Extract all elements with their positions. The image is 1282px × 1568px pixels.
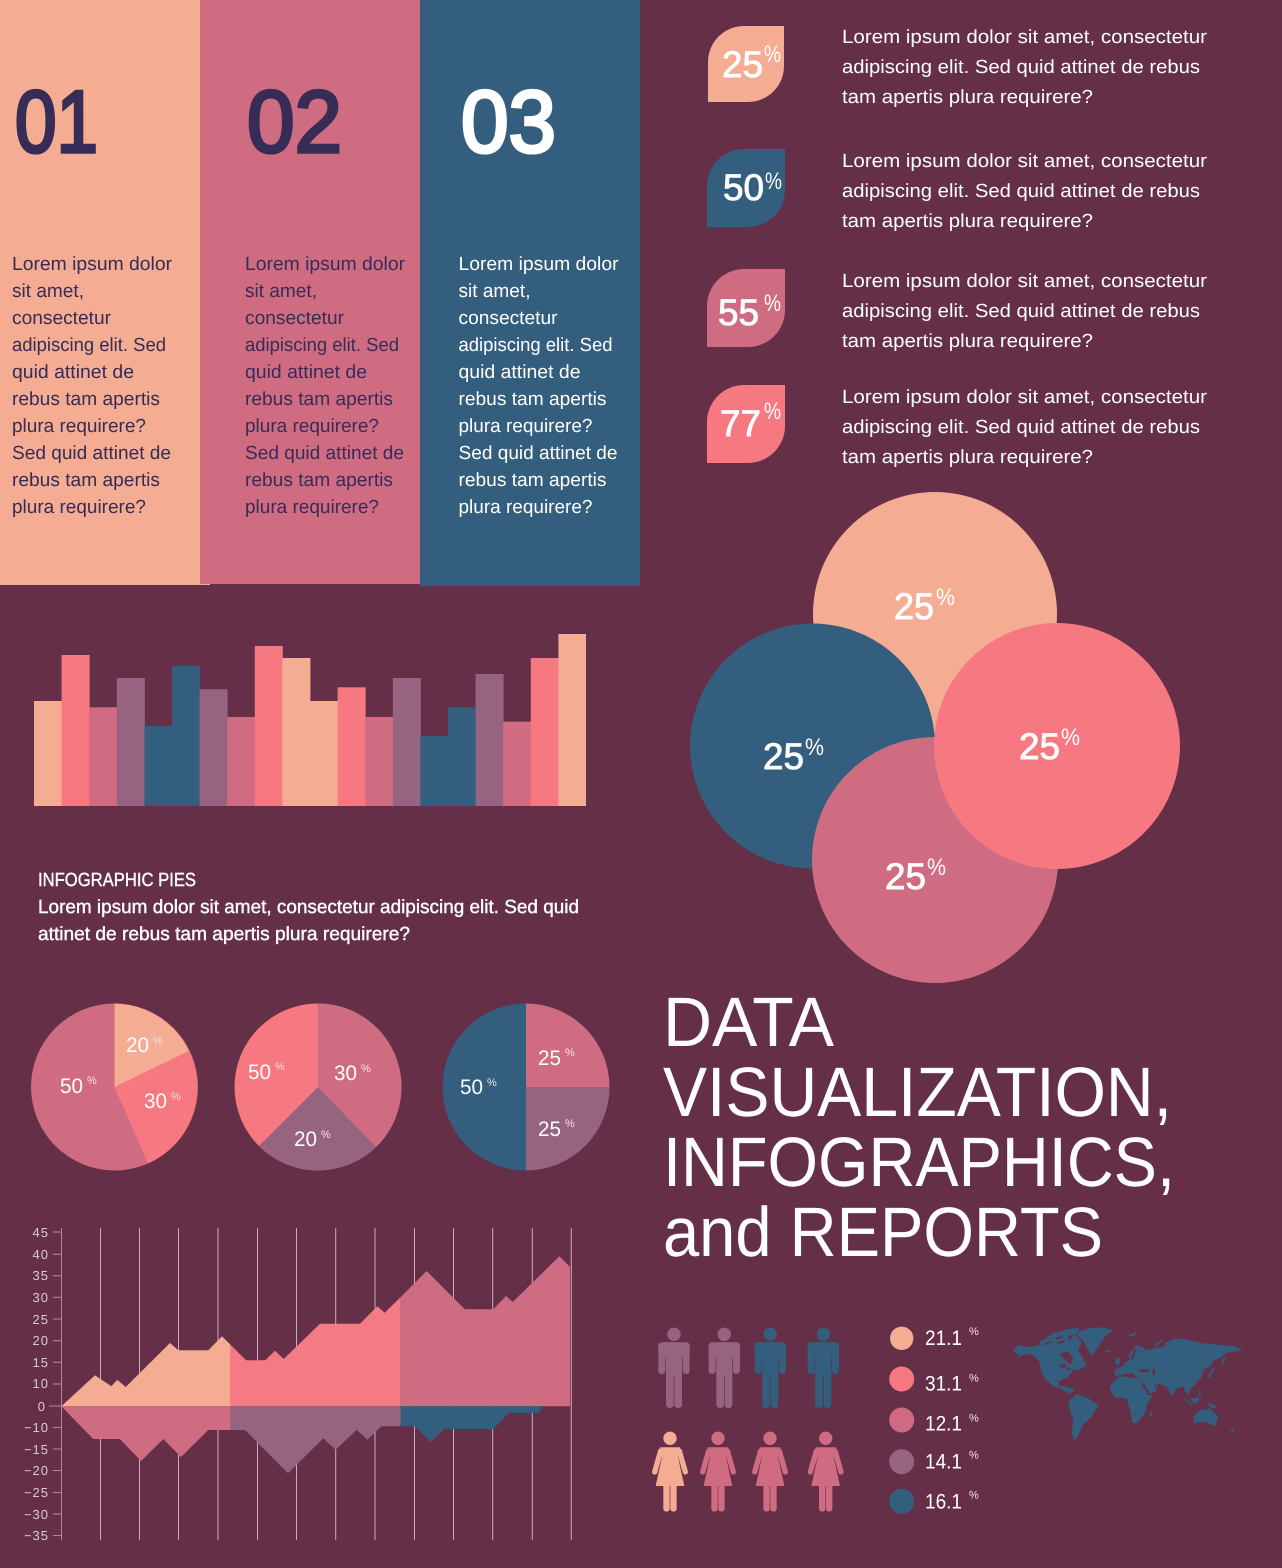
badge: 25 percent: 25 (722, 44, 763, 85)
pie chart 1: 20 (126, 1034, 149, 1057)
text block: column 01: quid attinet de (12, 362, 134, 383)
text block: column 02: rebus tam apertis (245, 470, 393, 491)
pie chart 3: 50 (460, 1076, 483, 1099)
legend: 12.1 (925, 1413, 962, 1436)
number 03: 03 (461, 72, 556, 171)
pie chart 1 (31, 1004, 198, 1170)
icon: man 1 (658, 1328, 690, 1408)
pie chart 2: 30 (334, 1062, 357, 1085)
chart: four overlapping circles: % (936, 584, 955, 611)
icons: women (655, 1432, 841, 1512)
text block: item 1: Lorem ipsum dolor sit amet, consectetur (842, 27, 1208, 48)
text block: column 02: rebus tam apertis (245, 389, 393, 410)
pie chart 3: 25 (538, 1047, 561, 1070)
area: blue lower (401, 1406, 542, 1442)
badge: 77 percent (707, 385, 785, 463)
text block: column 03: quid attinet de (458, 362, 580, 383)
text block: column 01: adipiscing elit. Sed (12, 335, 166, 356)
area: peach upper (61, 1336, 230, 1406)
icon: woman 1 (655, 1432, 685, 1512)
icon: woman 3 (755, 1432, 785, 1512)
text block: column 03: Sed quid attinet de (458, 443, 618, 464)
panel: column 02 (200, 0, 420, 584)
badge: 77 percent: 77 (720, 403, 761, 444)
map: Americas and Greenland (1013, 1327, 1113, 1441)
chart: four overlapping circles: % (927, 854, 946, 881)
text block: column 02: Lorem ipsum dolor (245, 254, 406, 275)
badge: 55 percent: 55 (718, 292, 759, 333)
chart: four overlapping circles: 25 (885, 856, 926, 897)
text block: column 01: rebus tam apertis (12, 389, 160, 410)
axis labels: −35 (24, 1528, 49, 1543)
text block: item 4: tam apertis plura requirere? (842, 447, 1093, 468)
pie chart 2: % (361, 1063, 371, 1075)
text block: infographic pies intro: INFOGRAPHIC PIES (38, 870, 196, 891)
chart: four overlapping circles: % (1061, 724, 1080, 751)
text block: column 02 (245, 254, 406, 518)
text block: item 1 (842, 27, 1208, 108)
pie chart 2: 50 (248, 1061, 271, 1084)
number 01: 01 (15, 72, 98, 171)
badge: 55 percent: % (764, 290, 781, 317)
text block: item 1: tam apertis plura requirere? (842, 87, 1093, 108)
chart: four overlapping circles: 25 (894, 586, 934, 627)
area: rose lower (61, 1406, 231, 1461)
text block: item 4 (842, 387, 1208, 468)
pie chart 3 (442, 1004, 610, 1170)
legend (889, 1326, 979, 1514)
axis labels: 10 (33, 1376, 49, 1391)
legend: 21.1 (925, 1327, 962, 1350)
text block: column 02: quid attinet de (245, 362, 367, 383)
axis labels (24, 1225, 49, 1543)
text block: column 03 (458, 254, 619, 518)
text block: item 2: Lorem ipsum dolor sit amet, consectetur (842, 151, 1208, 172)
text block: infographic pies intro: attinet de rebus tam apertis plura requirere? (38, 924, 410, 945)
badge: 50 percent (707, 149, 785, 227)
map: Eurasia, Africa and Oceania (1110, 1333, 1243, 1433)
text block: column 01: Sed quid attinet de (12, 443, 171, 464)
pie chart 1: % (87, 1075, 97, 1087)
chart: four overlapping circles (690, 492, 1180, 983)
axis labels: −30 (24, 1507, 49, 1522)
pie chart 1: 50 (60, 1075, 83, 1098)
legend: 31.1 (925, 1373, 962, 1396)
chart: four overlapping circles: % (805, 734, 824, 761)
text block: item 3: adipiscing elit. Sed quid attinet de rebus (842, 301, 1200, 322)
axis labels: −20 (24, 1463, 49, 1478)
axis labels: 35 (33, 1268, 49, 1283)
number 02: 02 (247, 72, 342, 171)
text block: item 4: adipiscing elit. Sed quid attinet de rebus (842, 417, 1200, 438)
text block: item 1: adipiscing elit. Sed quid attinet de rebus (842, 57, 1200, 78)
axis labels: 40 (33, 1247, 49, 1262)
text block: column 02: sit amet, (245, 281, 317, 302)
area chart (24, 1225, 571, 1543)
text block: infographic pies intro: Lorem ipsum dolor sit amet, consectetur adipiscing elit. Sed quid (38, 897, 579, 918)
title: DATA (663, 983, 834, 1061)
pie chart 3: 25 (538, 1118, 561, 1141)
icon: man 2 (709, 1328, 740, 1408)
pie chart 1: 30 (144, 1090, 167, 1113)
text block: column 01: plura requirere? (12, 497, 146, 518)
text block: column 01: rebus tam apertis (12, 470, 160, 491)
text block: column 03: adipiscing elit. Sed (458, 335, 612, 356)
text block: item 3: tam apertis plura requirere? (842, 331, 1093, 352)
text block: item 4: Lorem ipsum dolor sit amet, consectetur (842, 387, 1208, 408)
text block: column 03: consectetur (458, 308, 558, 329)
pie chart 3: % (487, 1077, 497, 1089)
axis labels: 25 (33, 1312, 49, 1327)
pie chart 2: 20 (294, 1128, 317, 1151)
title: INFOGRAPHICS, (663, 1123, 1175, 1201)
panel: column 03 (420, 0, 640, 586)
title: VISUALIZATION, (663, 1053, 1172, 1131)
chart: four overlapping circles: 25 (763, 736, 804, 777)
text block: column 02: plura requirere? (245, 497, 379, 518)
badge: 25 percent (708, 26, 784, 102)
text block: item 2: tam apertis plura requirere? (842, 211, 1093, 232)
panel: column 01 (0, 0, 210, 585)
bar chart (34, 634, 586, 806)
pie chart 1: % (171, 1091, 181, 1103)
text block: column 03: sit amet, (458, 281, 530, 302)
legend: % (969, 1413, 979, 1425)
axis labels: −15 (24, 1442, 49, 1457)
text block: column 01: consectetur (12, 308, 112, 329)
badge: 77 percent: % (764, 398, 781, 425)
pie chart 3: % (565, 1118, 575, 1130)
legend: % (969, 1449, 979, 1461)
text block: item 3 (842, 271, 1208, 352)
text block: infographic pies intro (38, 870, 579, 945)
badge: 50 percent: % (765, 168, 782, 195)
legend: % (969, 1373, 979, 1385)
text block: item 2 (842, 151, 1208, 232)
text block: column 03: plura requirere? (458, 497, 592, 518)
text block: column 01 (12, 254, 173, 518)
icon: man 3 (755, 1328, 786, 1408)
axis labels: 20 (33, 1333, 49, 1348)
icon: man 4 (808, 1328, 839, 1408)
icons: men (658, 1328, 839, 1408)
panel: percentage list (707, 26, 1208, 468)
area: mauve lower (231, 1406, 401, 1473)
text block: column 01: Lorem ipsum dolor (12, 254, 173, 275)
text block: column 03: plura requirere? (458, 416, 592, 437)
text block: column 01: plura requirere? (12, 416, 146, 437)
icon: woman 4 (810, 1432, 841, 1512)
area: rose upper (400, 1256, 570, 1406)
icon: woman 2 (703, 1432, 733, 1512)
legend: 16.1 (925, 1490, 962, 1513)
text block: column 02: plura requirere? (245, 416, 379, 437)
title: and REPORTS (663, 1193, 1103, 1271)
badge: 55 percent (707, 269, 785, 347)
text block: item 2: adipiscing elit. Sed quid attinet de rebus (842, 181, 1200, 202)
text block: column 02: adipiscing elit. Sed (245, 335, 399, 356)
text block: column 02: consectetur (245, 308, 345, 329)
legend: % (969, 1489, 979, 1501)
pie chart 3: % (565, 1047, 575, 1059)
legend: 14.1 (925, 1450, 962, 1473)
badge: 50 percent: 50 (723, 167, 764, 208)
text block: column 01: sit amet, (12, 281, 84, 302)
area: coral upper (230, 1298, 400, 1406)
axis labels: 30 (33, 1290, 49, 1305)
axis labels: 15 (33, 1355, 49, 1370)
axis labels: −25 (24, 1485, 49, 1500)
legend: % (969, 1326, 979, 1338)
text block: column 02: Sed quid attinet de (245, 443, 404, 464)
axis labels: −10 (24, 1420, 49, 1435)
badge: 25 percent: % (764, 41, 781, 68)
pie chart 2: % (321, 1129, 331, 1141)
axis labels: 0 (38, 1399, 46, 1414)
pie chart 1: % (153, 1035, 163, 1047)
chart: four overlapping circles: 25 (1019, 726, 1060, 767)
axis labels: 45 (33, 1225, 49, 1240)
text block: column 03: Lorem ipsum dolor (458, 254, 619, 275)
text block: column 03: rebus tam apertis (458, 470, 606, 491)
world map (1013, 1327, 1243, 1441)
pie chart 2: % (275, 1061, 285, 1073)
pie chart 2 (234, 1004, 402, 1170)
text block: column 03: rebus tam apertis (458, 389, 606, 410)
text block: item 3: Lorem ipsum dolor sit amet, consectetur (842, 271, 1208, 292)
title (663, 983, 1175, 1271)
